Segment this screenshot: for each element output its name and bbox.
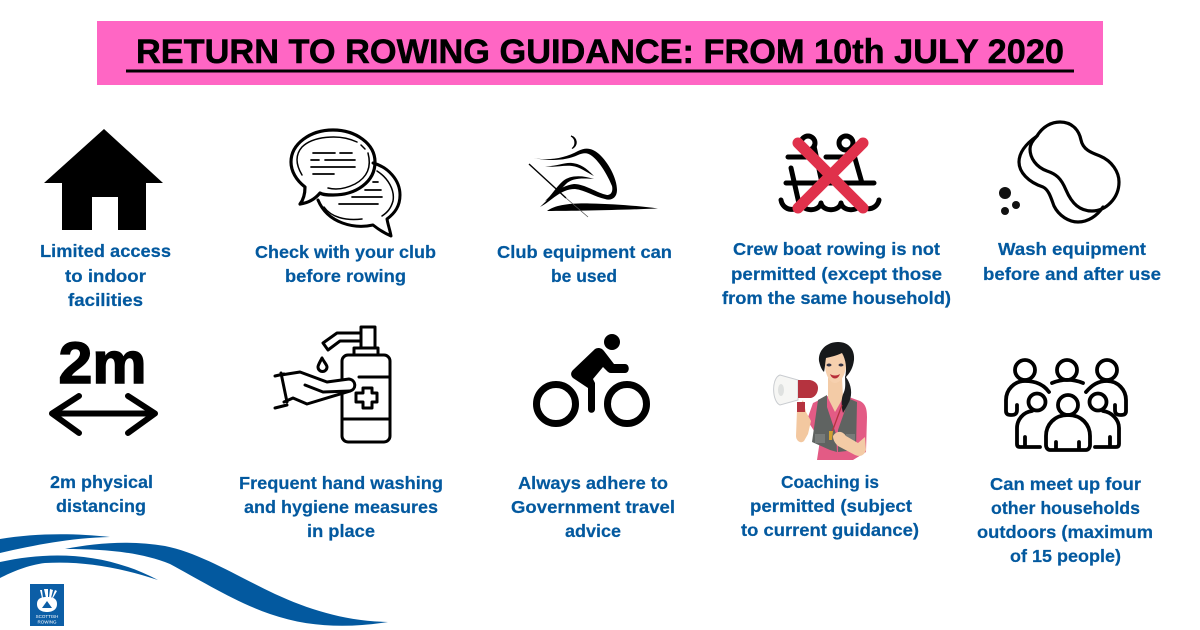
text: travel advice: Government travel (511, 497, 675, 517)
text: crew boat: permitted (except those (731, 264, 942, 284)
title banner: RETURN TO ROWING GUIDANCE: FROM 10th JULY 2020 (136, 33, 1064, 71)
text: households: Can meet up four (990, 474, 1141, 494)
text: coaching: permitted (subject (750, 496, 912, 516)
text: coaching: Coaching is (781, 472, 879, 492)
text: travel advice: Always adhere to (518, 473, 668, 493)
text: wash equipment: Wash equipment (998, 239, 1146, 259)
text: crew boat (722, 239, 951, 308)
decorative blue waves (0, 534, 388, 626)
text: limited access: Limited access (40, 241, 171, 261)
text: hand washing: and hygiene measures (244, 497, 438, 517)
text: travel advice: advice (565, 521, 621, 541)
icon: rower (529, 136, 658, 217)
text: check with club (255, 242, 436, 286)
text: club equipment: be used (551, 266, 617, 286)
icon: sponge (999, 122, 1119, 222)
logo: Scottish Rowing (30, 584, 64, 626)
icon: group of people (1006, 360, 1126, 450)
text: hand washing: in place (307, 521, 375, 541)
text: travel advice (511, 473, 675, 541)
icon: coach with megaphone (774, 342, 867, 460)
text: coaching: to current guidance) (741, 520, 919, 540)
text: limited access: facilities (68, 290, 143, 310)
text: wash equipment (983, 239, 1161, 284)
text: hand washing (239, 473, 443, 541)
text: 2m distancing: 2m physical (50, 472, 153, 492)
icon: hand sanitiser (275, 327, 390, 442)
text: wash equipment: before and after use (983, 264, 1161, 284)
text: hand washing: Frequent hand washing (239, 473, 443, 493)
text: households: of 15 people) (1010, 546, 1121, 566)
text: 2m distancing (50, 472, 153, 516)
text: 2m distancing: distancing (56, 496, 146, 516)
logo: Scottish Rowing: ROWING (38, 620, 57, 624)
text: club equipment (497, 242, 672, 286)
text: households: outdoors (maximum (977, 522, 1153, 542)
icon: cyclist (536, 334, 646, 424)
text: limited access: to indoor (65, 266, 146, 286)
icon: crew boat crossed out (781, 136, 879, 210)
icon: house (44, 129, 163, 230)
text: coaching (741, 472, 919, 540)
title banner (97, 21, 1103, 85)
text: club equipment: Club equipment can (497, 242, 672, 262)
text: check with club: Check with your club (255, 242, 436, 262)
icon: speech bubbles (291, 130, 400, 236)
text: limited access (40, 241, 171, 310)
text: crew boat: Crew boat rowing is not (733, 239, 940, 259)
text: check with club: before rowing (285, 266, 406, 286)
text: households (977, 474, 1153, 566)
text: households: other households (991, 498, 1140, 518)
logo: Scottish Rowing: SCOTTISH (36, 614, 58, 619)
icon: 2m distance arrow: 2m (58, 331, 146, 396)
text: crew boat: from the same household) (722, 288, 951, 308)
icon: 2m distance arrow (52, 331, 155, 433)
